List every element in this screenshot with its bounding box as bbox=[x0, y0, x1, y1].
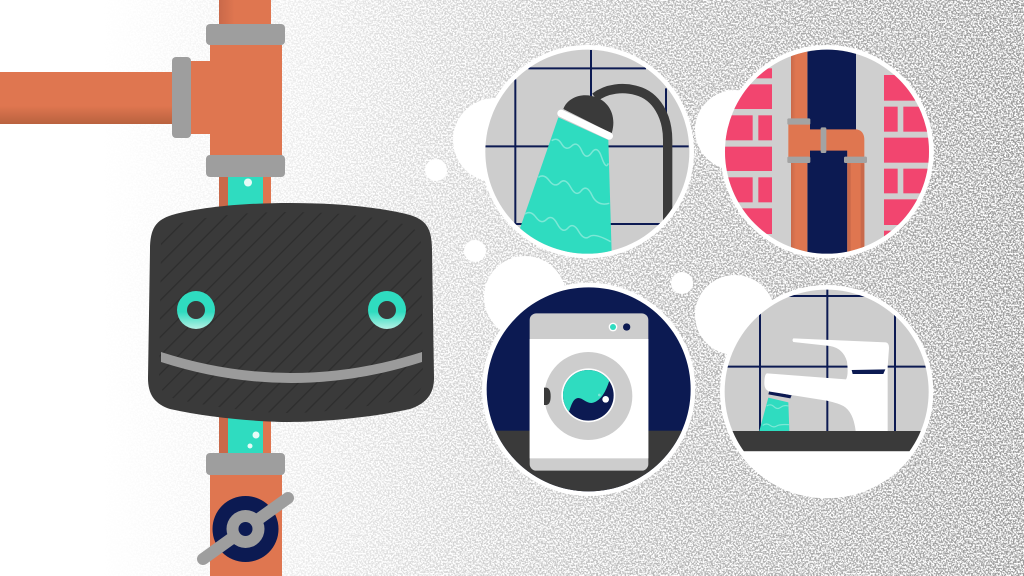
T junction body bbox=[190, 45, 282, 156]
pipe collars bbox=[787, 118, 867, 163]
bricks bbox=[720, 68, 934, 237]
tile grid bbox=[485, 50, 689, 225]
device body bbox=[148, 203, 434, 422]
pipe section with water above device bbox=[219, 176, 271, 208]
aerator bbox=[768, 391, 792, 398]
navy column bbox=[807, 47, 856, 257]
smile bbox=[161, 352, 422, 383]
handle slot bbox=[852, 369, 885, 374]
panel: washing machine bbox=[480, 280, 700, 501]
pipe assembly: lower plumbing and valve bbox=[203, 415, 288, 576]
left eye bbox=[177, 291, 215, 329]
floor bbox=[495, 430, 682, 492]
tile grid bbox=[725, 288, 927, 431]
top collar bbox=[206, 24, 285, 45]
pipe section with water below device bbox=[219, 415, 271, 455]
lower junction collar bbox=[206, 155, 285, 177]
lower collar bbox=[206, 453, 285, 475]
panel: pipes and bricks bbox=[722, 45, 934, 258]
indicator lights bbox=[609, 323, 630, 331]
drum bbox=[544, 352, 632, 440]
machine body bbox=[530, 313, 648, 471]
body hatch texture bbox=[159, 212, 423, 413]
shower head bbox=[561, 95, 613, 136]
right eye bbox=[368, 291, 406, 329]
thought bubbles bbox=[425, 90, 775, 355]
lower pipe bbox=[210, 473, 282, 576]
door hinge bbox=[544, 388, 551, 405]
pipe assembly: upper plumbing bbox=[0, 0, 285, 208]
smiling device bbox=[148, 203, 434, 422]
shower pipe bbox=[595, 89, 668, 230]
valve with handle bbox=[203, 496, 288, 562]
copper pipes bbox=[788, 47, 864, 257]
side collar bbox=[172, 57, 191, 138]
tap body and handle bbox=[764, 338, 889, 431]
panel: tap bbox=[720, 285, 934, 498]
panel: shower bbox=[480, 40, 700, 260]
water stream bbox=[520, 117, 612, 257]
counter bbox=[732, 431, 921, 452]
vertical pipe top bbox=[219, 0, 271, 26]
water stream bbox=[759, 398, 789, 431]
horizontal inlet pipe bbox=[0, 72, 173, 124]
